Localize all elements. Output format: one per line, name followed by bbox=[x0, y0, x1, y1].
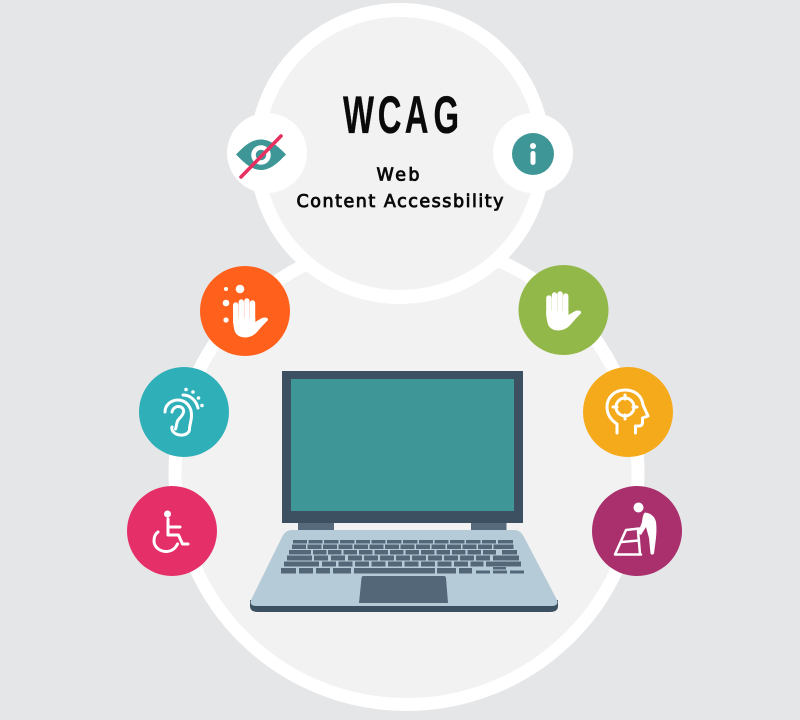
icon: raised hand bbox=[518, 265, 608, 355]
subtitle: Content Accessbility bbox=[296, 192, 504, 212]
subtitle: Web bbox=[376, 166, 420, 186]
laptop illustration bbox=[250, 371, 558, 612]
icon: wheelchair bbox=[127, 486, 217, 576]
laptop trackpad bbox=[359, 576, 448, 603]
title: WCAG bbox=[343, 86, 459, 145]
icon: ear with hearing aid bbox=[139, 367, 229, 457]
icon: hand with braille dots bbox=[200, 266, 290, 356]
icon: elderly person with walker bbox=[592, 486, 682, 576]
laptop screen bbox=[282, 371, 523, 523]
lower ring panel bbox=[175, 242, 638, 704]
icon: information bbox=[493, 113, 573, 193]
laptop hinges bbox=[298, 523, 506, 530]
icon: crossed-out eye bbox=[227, 113, 307, 193]
laptop keyboard bbox=[281, 540, 524, 574]
subtitle bbox=[296, 166, 504, 212]
upper ring panel bbox=[256, 10, 544, 297]
icon: head with target bbox=[583, 367, 673, 457]
laptop base bbox=[250, 530, 558, 612]
